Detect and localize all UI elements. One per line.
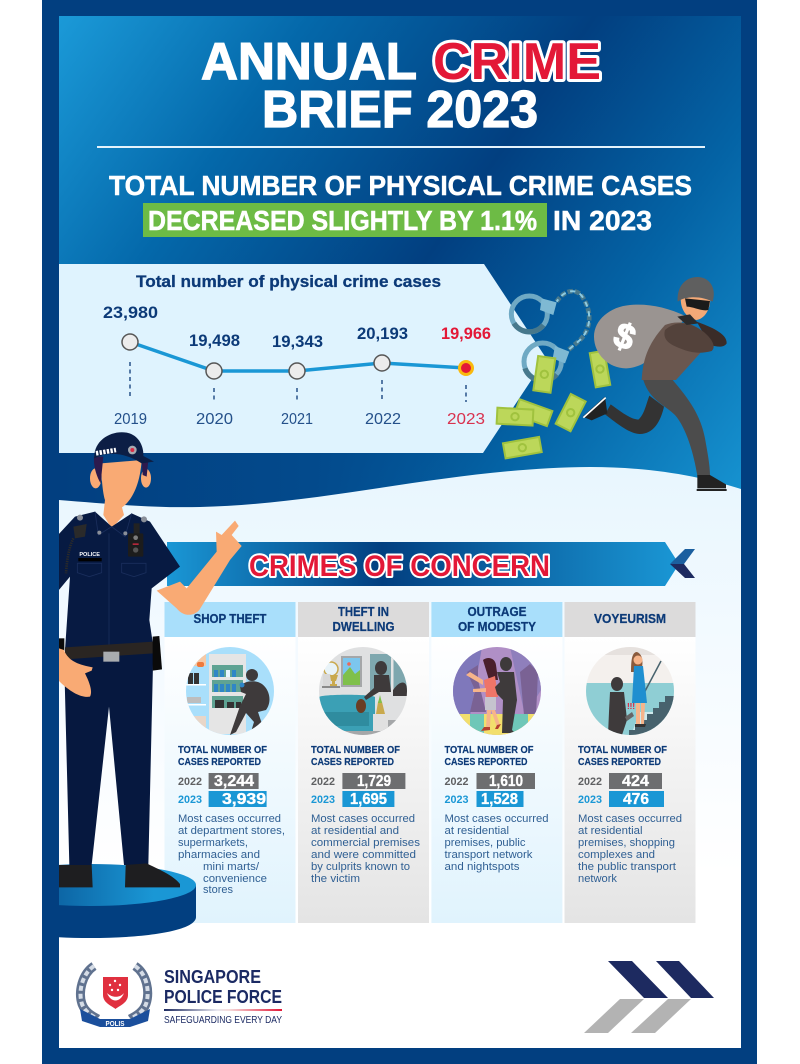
description: commercial premises <box>311 837 421 849</box>
wordmark: SINGAPORE <box>164 967 261 987</box>
panel: shop theft <box>164 602 296 923</box>
stats: 1,729 <box>357 773 391 790</box>
subtitle: IN 2023 <box>553 205 652 236</box>
near arm <box>664 323 714 353</box>
stats: 2023 <box>178 794 202 806</box>
mask <box>685 298 710 310</box>
beanie <box>678 277 714 302</box>
stats: CASES REPORTED <box>311 756 394 768</box>
stats: 1,528 <box>481 791 518 808</box>
description: the public transport <box>578 861 676 873</box>
description: by culprits known to <box>311 861 410 873</box>
crest <box>80 966 150 1028</box>
header <box>431 602 562 637</box>
illustration: police officer <box>53 432 242 887</box>
description <box>578 813 682 885</box>
dark band under chart <box>59 453 489 513</box>
description: and nightspots <box>444 861 520 873</box>
header: OF MODESTY <box>458 620 537 634</box>
description: pharmacies and <box>178 849 260 861</box>
stats: 1,610 <box>489 773 523 790</box>
icon: double chevron <box>584 961 714 1033</box>
holster <box>153 636 162 671</box>
description <box>178 813 285 896</box>
years: 2023 <box>447 411 485 428</box>
shoes <box>53 863 180 887</box>
stats: 2022 <box>178 776 202 788</box>
description: network <box>578 873 617 885</box>
panel: theft in dwelling <box>298 602 429 923</box>
icon: crowded nightspot <box>453 647 541 735</box>
description: Most cases occurred <box>578 813 682 825</box>
panel: line chart <box>59 264 546 453</box>
header <box>298 602 429 637</box>
stats: 3,939 <box>222 791 266 808</box>
description: Most cases occurred <box>178 813 281 825</box>
logo: Singapore Police Force <box>80 966 282 1028</box>
description: mini marts/ <box>203 861 260 873</box>
subtitle <box>109 170 692 237</box>
stats: 1,695 <box>350 791 387 808</box>
heading: CRIMES OF CONCERN <box>249 550 550 583</box>
icon: thief at store shelf <box>186 647 274 735</box>
values: 20,193 <box>357 324 408 343</box>
neck and face <box>101 460 142 528</box>
description <box>311 813 421 885</box>
header <box>564 602 696 637</box>
crest: POLIS <box>106 1021 125 1028</box>
header: VOYEURISM <box>594 612 666 626</box>
title: BRIEF 2023 <box>262 81 538 139</box>
stats: TOTAL NUMBER OF <box>311 744 401 756</box>
logo: Singapore Police Force: POLICE FORCE <box>164 987 282 1007</box>
banner: crimes of concern <box>167 542 695 586</box>
subtitle: TOTAL NUMBER OF PHYSICAL CRIME CASES <box>109 170 692 201</box>
description: stores <box>203 884 233 896</box>
blue header background <box>59 16 741 496</box>
front leg <box>643 380 710 476</box>
thief <box>583 277 727 491</box>
face <box>681 295 710 320</box>
description <box>444 813 548 873</box>
subtitle: DECREASED SLIGHTLY BY 1.1% <box>148 205 537 236</box>
title: ANNUAL <box>201 33 417 91</box>
stats: CASES REPORTED <box>178 756 261 768</box>
cap <box>94 432 154 463</box>
shoulder tabs and pockets <box>77 512 146 650</box>
description: transport network <box>444 849 533 861</box>
front shoe <box>697 475 726 488</box>
stats: TOTAL NUMBER OF <box>178 744 268 756</box>
lower light background with wave <box>59 467 741 1048</box>
description: the victim <box>311 873 360 885</box>
years: 2021 <box>281 411 313 428</box>
platform <box>59 864 196 938</box>
values: 23,980 <box>103 303 158 322</box>
glove <box>677 314 698 325</box>
years: 2022 <box>365 411 401 428</box>
description: Most cases occurred <box>444 813 548 825</box>
trend line <box>130 342 466 371</box>
trousers <box>64 650 153 865</box>
icon: banknotes <box>497 351 610 458</box>
tagline: SAFEGUARDING EVERY DAY <box>164 1015 282 1026</box>
values <box>103 303 491 351</box>
buckle <box>103 652 119 662</box>
icon: handcuffs <box>511 291 589 381</box>
name tag: POLICE <box>79 552 100 558</box>
data points <box>122 334 390 379</box>
icon: thief in living room <box>319 647 407 735</box>
description: at residential and <box>311 825 399 837</box>
title <box>201 33 601 139</box>
description: supermarkets, <box>178 837 248 849</box>
values: 19,966 <box>441 324 491 343</box>
values: 19,343 <box>272 332 323 351</box>
stats: TOTAL NUMBER OF <box>578 744 668 756</box>
description: at residential <box>444 825 509 837</box>
description: at residential <box>578 825 642 837</box>
description: premises, shopping <box>578 837 675 849</box>
stats <box>178 744 268 808</box>
back shoe <box>583 397 607 420</box>
drop lines <box>130 362 466 402</box>
panel: outrage of modesty <box>431 602 562 923</box>
title: CRIME <box>433 33 601 91</box>
money bag <box>594 305 687 368</box>
icon: voyeur on escalator <box>586 647 674 735</box>
description: and were committed <box>311 849 416 861</box>
years: 2019 <box>114 411 147 428</box>
header: THEFT IN <box>338 605 389 619</box>
header <box>164 602 296 637</box>
header: SHOP THEFT <box>194 612 267 626</box>
stats: 2023 <box>444 794 468 806</box>
shirt <box>53 512 180 650</box>
stats: 2023 <box>578 794 602 806</box>
far arm <box>697 322 727 347</box>
stats: 476 <box>623 791 649 808</box>
stats <box>578 744 668 808</box>
stats: 424 <box>622 773 649 790</box>
years <box>114 411 485 428</box>
years: 2020 <box>196 411 233 428</box>
stats: 3,244 <box>214 773 254 790</box>
jacket <box>642 322 707 380</box>
stats: CASES REPORTED <box>578 756 661 768</box>
description: at department stores, <box>178 825 285 837</box>
stats <box>311 744 405 808</box>
stats: 2022 <box>444 776 468 788</box>
hand at side <box>59 648 93 697</box>
radio <box>73 524 87 538</box>
title divider <box>97 146 705 148</box>
ears <box>90 468 151 488</box>
stats: 2022 <box>311 776 335 788</box>
header: OUTRAGE <box>468 605 526 619</box>
icon: chevron <box>670 549 695 578</box>
name tag <box>78 552 102 561</box>
pointing arm <box>157 521 242 615</box>
stats: 2022 <box>578 776 602 788</box>
body camera <box>128 523 143 557</box>
stats <box>444 744 535 808</box>
description: convenience <box>203 873 267 885</box>
description: Most cases occurred <box>311 813 415 825</box>
description: complexes and <box>578 849 655 861</box>
header: DWELLING <box>332 620 394 634</box>
stats: CASES REPORTED <box>444 756 528 768</box>
back leg <box>605 396 664 434</box>
panel: voyeurism <box>564 602 696 923</box>
values: 19,498 <box>189 331 240 350</box>
stats: TOTAL NUMBER OF <box>444 744 534 756</box>
dollar sign: $ <box>608 315 641 358</box>
description: premises, public <box>444 837 526 849</box>
chart title: Total number of physical crime cases <box>136 272 441 291</box>
belt <box>65 642 153 659</box>
highlighted 2023 point <box>458 360 474 376</box>
stats: 2023 <box>311 794 335 806</box>
hair <box>94 457 148 483</box>
icon: voyeur on escalator: !!! <box>627 702 635 711</box>
illustration: handcuffs, cash and thief <box>497 277 727 491</box>
